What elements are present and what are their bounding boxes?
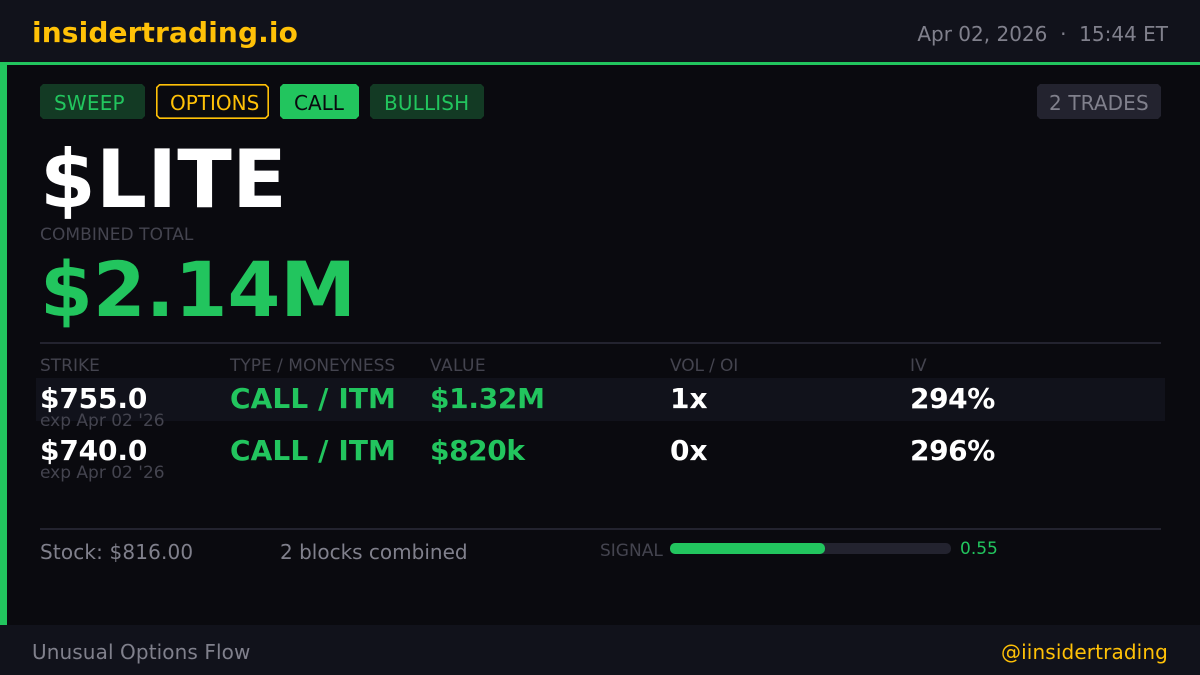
header bar xyxy=(0,0,1200,65)
signal meter xyxy=(600,539,998,561)
row 1 highlight xyxy=(36,378,1165,421)
ticker: $LITE xyxy=(40,133,287,226)
row 2 xyxy=(40,434,995,483)
badge: sweep xyxy=(40,84,145,119)
combined total label: COMBINED TOTAL xyxy=(40,225,193,245)
signal value: 0.55 xyxy=(960,539,998,559)
badge: call: CALL xyxy=(294,91,344,115)
signal label: SIGNAL xyxy=(600,541,663,561)
column headers: TYPE / MONEYNESS xyxy=(230,356,395,376)
divider xyxy=(40,528,1161,530)
column headers: STRIKE xyxy=(40,356,100,376)
badge: options xyxy=(156,84,269,119)
badge: sweep: SWEEP xyxy=(54,91,125,115)
signal track xyxy=(670,543,951,554)
divider xyxy=(40,342,1161,344)
date and time: Apr 02, 2026 · 15:44 ET xyxy=(917,22,1168,46)
column headers: IV xyxy=(910,356,927,376)
combined total value: $2.14M xyxy=(40,245,356,334)
footer label: Unusual Options Flow xyxy=(32,640,250,664)
badge: trade count xyxy=(1037,84,1161,119)
brand logo: insidertrading.io xyxy=(32,16,298,49)
row 2: $740.0 xyxy=(40,434,147,467)
row 2: 0x xyxy=(670,434,708,467)
left accent bar xyxy=(0,65,7,625)
row 1: 1x xyxy=(670,382,708,415)
badge: bullish xyxy=(370,84,484,119)
footer handle: @iinsidertrading xyxy=(1001,640,1168,664)
column headers: VALUE xyxy=(430,356,486,376)
column headers: VOL / OI xyxy=(670,356,738,376)
row 1 xyxy=(40,382,995,431)
signal fill xyxy=(670,543,825,554)
row 2: 296% xyxy=(910,434,995,467)
badge: trade count: 2 TRADES xyxy=(1049,91,1149,115)
column headers xyxy=(40,356,927,376)
row 1: CALL / ITM xyxy=(230,382,396,415)
row 2: CALL / ITM xyxy=(230,434,396,467)
row 1: 294% xyxy=(910,382,995,415)
stock price: Stock: $816.00 xyxy=(40,540,193,564)
badge: call xyxy=(280,84,359,119)
footer bar xyxy=(0,625,1200,675)
row 1: $755.0 xyxy=(40,382,147,415)
table xyxy=(36,356,1165,483)
badge: bullish: BULLISH xyxy=(384,91,469,115)
row 1: $1.32M xyxy=(430,382,545,415)
blocks combined: 2 blocks combined xyxy=(280,540,468,564)
badge: options: OPTIONS xyxy=(170,91,259,115)
row 2: $820k xyxy=(430,434,525,467)
row 2: exp Apr 02 '26 xyxy=(40,463,165,483)
row 1: exp Apr 02 '26 xyxy=(40,411,165,431)
